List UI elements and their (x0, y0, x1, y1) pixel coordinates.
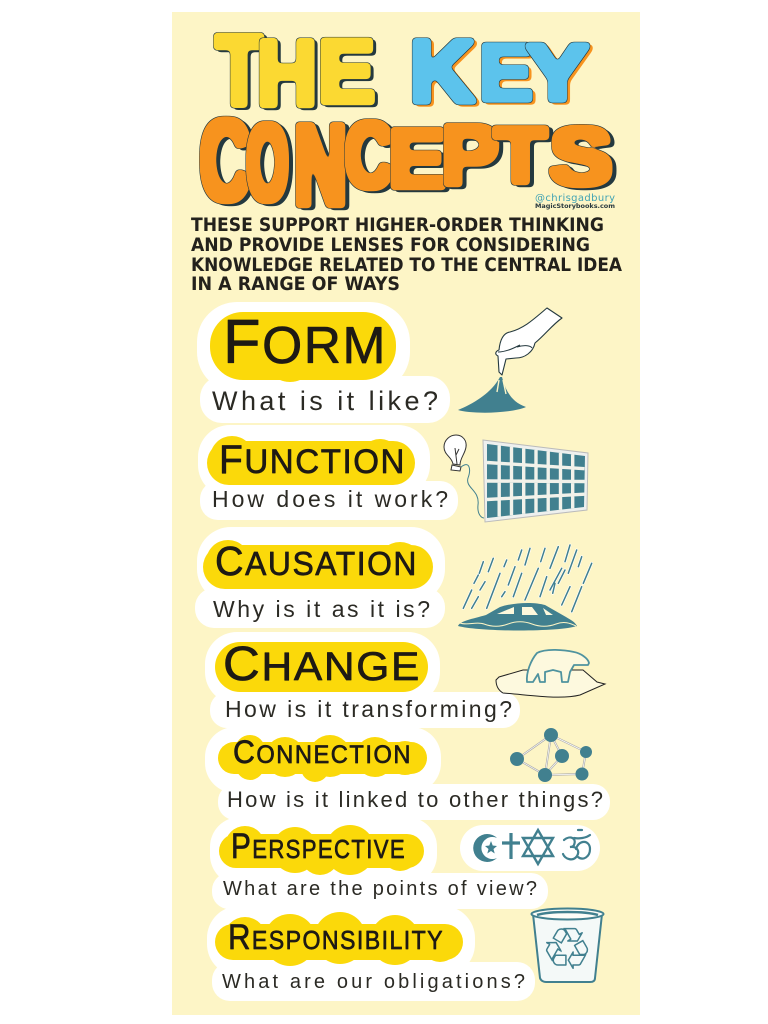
yellow highlight: Causation (203, 540, 433, 589)
polar bear (527, 650, 589, 682)
question: Responsibility: What are our obligations? (222, 971, 525, 993)
concept: Form (197, 302, 450, 423)
icon: light bulb and solar panel (444, 435, 588, 522)
icon: hand pouring sand cone (458, 308, 562, 413)
cross (502, 833, 520, 859)
heading: Responsibility: RESPONSIBILITY (228, 918, 444, 957)
light bulb with wire (444, 435, 484, 518)
title: The Key Concepts (200, 15, 613, 230)
white backing: Causation (195, 527, 445, 628)
title word: CONCEPTS: S (549, 112, 613, 202)
om symbol (563, 830, 590, 859)
white backing: Function (198, 425, 458, 520)
title word: THE (216, 15, 375, 127)
title word: CONCEPTS (200, 97, 613, 230)
title word: CONCEPTS: T (494, 111, 547, 199)
white backing: Responsibility (207, 906, 535, 1001)
icon: polar bear on melting ice (496, 650, 605, 697)
yellow highlight: Perspective (219, 825, 424, 875)
heading: Causation: CAUSATION (215, 538, 418, 584)
icon: connected network graph (510, 728, 592, 782)
ice floe (496, 670, 605, 697)
white backing: Connection (205, 727, 610, 820)
white backing: Perspective (210, 817, 548, 909)
question: Function: How does it work? (212, 486, 448, 512)
yellow highlight: Function (207, 436, 415, 485)
title word: CONCEPTS: C (345, 103, 393, 207)
concept: Change (205, 632, 520, 728)
icon: recycling bin (532, 908, 604, 982)
white backing: Change (205, 632, 520, 728)
title word: THE: E (318, 21, 375, 121)
question: Causation: Why is it as it is? (213, 596, 430, 622)
title word: KEY: Y (526, 28, 589, 117)
poster background panel (172, 12, 640, 1015)
question: Connection: How is it linked to other things? (227, 787, 603, 812)
concept: Responsibility (207, 906, 535, 1001)
rain streaks (463, 545, 592, 612)
title word: KEY (409, 21, 589, 121)
flooded car (458, 603, 577, 630)
concept: Connection (205, 727, 610, 820)
concept: Perspective (210, 817, 548, 909)
heading: Function: FUNCTION (219, 438, 406, 482)
white backing: Form (197, 302, 450, 423)
author credit: @chrisgadbury (535, 193, 615, 204)
intro text: THESE SUPPORT HIGHER-ORDER THINKING (191, 215, 604, 236)
intro text: AND PROVIDE LENSES FOR CONSIDERING (191, 235, 590, 256)
title word: CONCEPTS: P (441, 108, 499, 202)
question: Change: How is it transforming? (225, 696, 512, 722)
yellow highlight: Change (215, 642, 428, 692)
intro text (191, 215, 623, 295)
title word: CONCEPTS: O (247, 102, 288, 224)
title word: CONCEPTS: N (294, 100, 347, 230)
heading: Perspective: PERSPECTIVE (231, 827, 406, 866)
concept: Function (198, 425, 458, 520)
author credit (535, 193, 615, 210)
recycling arrows: ♻ (542, 917, 592, 982)
heading: Change: CHANGE (223, 638, 421, 691)
question: Form: What is it like? (212, 386, 438, 416)
author credit: MagicStorybooks.com (535, 202, 615, 210)
title word: CONCEPTS: E (388, 112, 446, 205)
title word: THE: H (257, 21, 317, 125)
icon: rain falling on flooded car (458, 545, 592, 630)
heading: Form: FORM (223, 308, 387, 377)
title word: KEY: E (479, 28, 533, 117)
intro text: IN A RANGE OF WAYS (191, 274, 400, 295)
title word: THE: T (216, 15, 262, 127)
yellow highlight: Connection (218, 735, 427, 782)
solar panel (483, 440, 588, 522)
yellow highlight: Responsibility (215, 912, 463, 966)
yellow highlight: Form (210, 312, 396, 382)
title word: CONCEPTS: C (200, 97, 250, 225)
title word: KEY: K (409, 21, 475, 121)
star of David (523, 830, 553, 864)
intro text: KNOWLEDGE RELATED TO THE CENTRAL IDEA (191, 255, 623, 276)
white backing (460, 825, 600, 871)
crescent and star (473, 834, 497, 862)
concept: Causation (195, 527, 445, 628)
question: Perspective: What are the points of view? (223, 878, 537, 900)
icon: religious symbols (460, 825, 600, 871)
heading: Connection: CONNECTION (233, 734, 412, 770)
